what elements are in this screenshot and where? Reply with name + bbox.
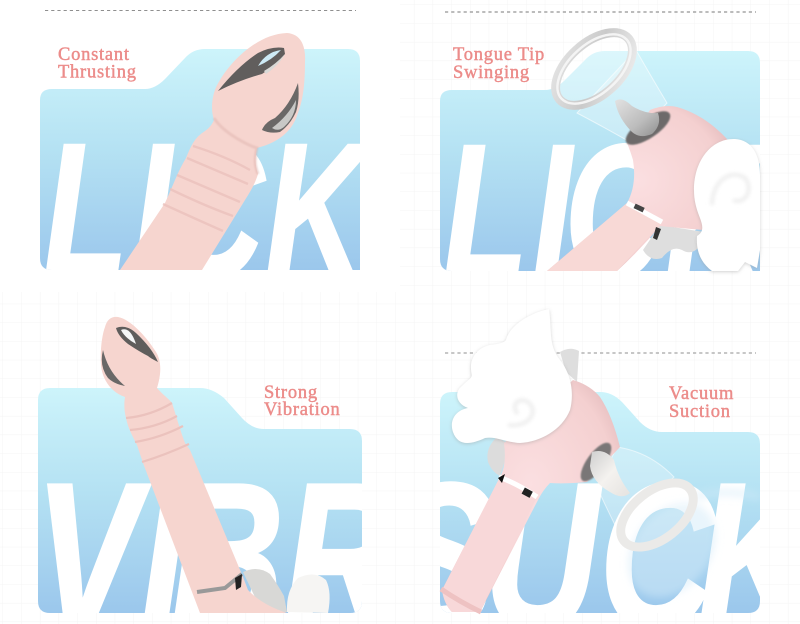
folder background [440,51,760,271]
divider line lower right [445,352,756,354]
heading: strong vibration: Strong [264,383,318,403]
folder background [40,49,360,270]
panel: vacuum suction [440,309,760,614]
heading: tongue tip swinging: Tongue Tip [453,45,545,65]
folder background: LICK [44,105,373,317]
heading: constant thrusting: Constant [58,45,130,65]
heading: strong vibration: Vibration [264,400,341,420]
divider line top right [445,11,756,13]
panel: strong vibration [38,316,362,613]
divider line top left [45,10,356,12]
heading: vacuum suction: Suction [669,402,731,422]
heading: tongue tip swinging: Swinging [453,63,530,83]
folder background: LICK [444,106,773,318]
air splash [628,488,756,599]
folder background [440,392,760,613]
panel: constant thrusting [40,10,360,270]
product: suction head with wing [441,309,705,612]
heading: constant thrusting: Thrusting [58,62,137,82]
panel: tongue tip swinging [440,11,762,274]
product: suction head with wing [542,19,760,271]
product: ribbed head [120,33,305,270]
heading: vacuum suction: Vacuum [669,384,734,404]
folder background [38,388,362,613]
product: ribbed head with wing [101,317,330,613]
